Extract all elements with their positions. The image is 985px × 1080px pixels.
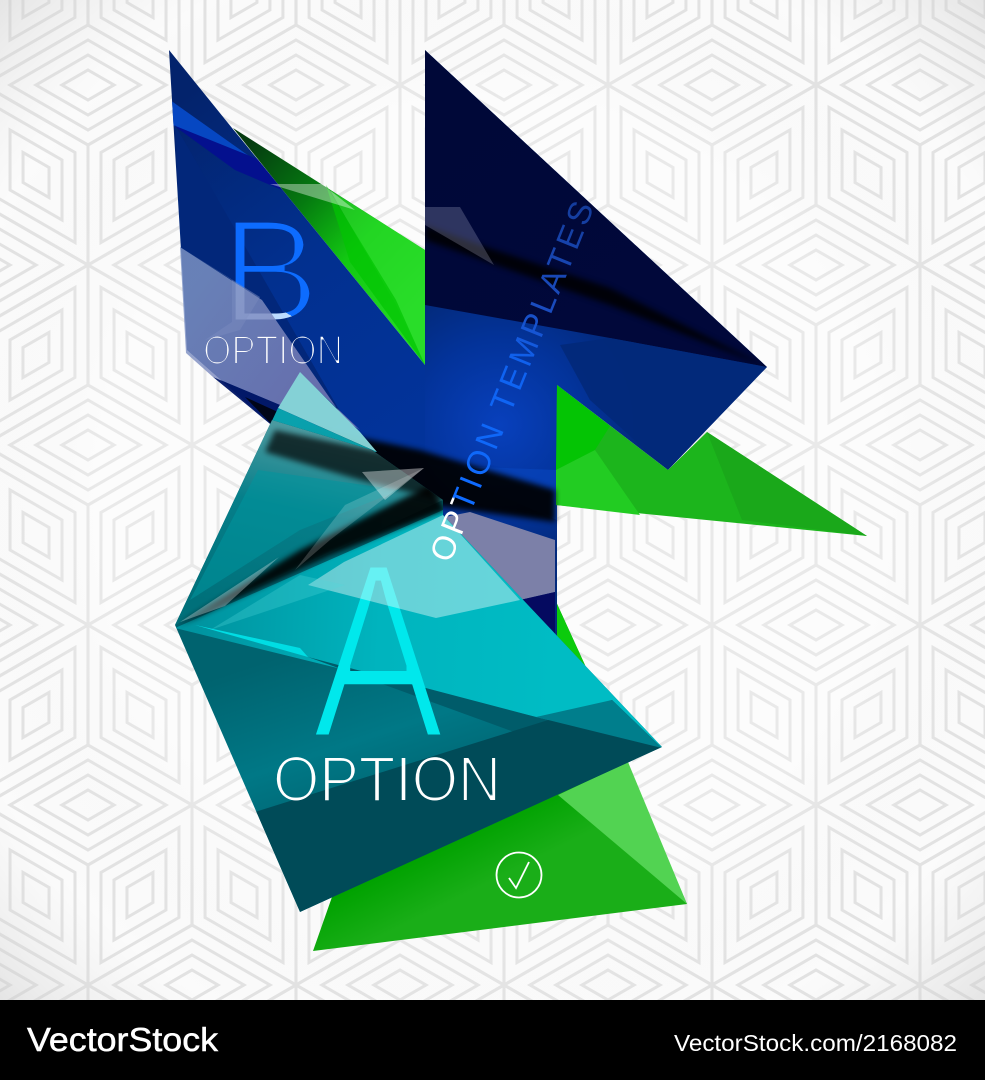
upper teal section bbox=[175, 420, 443, 625]
darkest bottom band bbox=[255, 700, 662, 912]
rotated heading: option templates: OPTION TEMPLATES bbox=[422, 196, 601, 567]
panel: lavender facet over option B bbox=[180, 247, 377, 452]
panel: lower green triangle bbox=[313, 595, 687, 951]
bright teal section bbox=[175, 510, 662, 747]
black diagonal streak bbox=[178, 485, 445, 625]
label: option B: OPTION bbox=[203, 327, 343, 373]
footer bar bbox=[0, 1000, 985, 1080]
label: option A: OPTION bbox=[273, 743, 501, 815]
dark top facet bbox=[425, 50, 767, 367]
dark lower strip bbox=[308, 657, 662, 748]
panel: option A teal facet bbox=[175, 420, 662, 912]
panel: upper left green triangle bbox=[233, 128, 425, 365]
streaks in the upper section bbox=[190, 470, 400, 600]
footer brand: VectorStock bbox=[27, 1021, 219, 1058]
panel: option B blue facet bbox=[169, 50, 425, 487]
letter B: B bbox=[221, 189, 320, 354]
panel: lower blue and lavender strip bbox=[300, 425, 555, 635]
panel: option templates navy facet bbox=[425, 50, 767, 640]
light facets over letters bbox=[180, 468, 520, 630]
footer image id: VectorStock.com/2168082 bbox=[674, 1030, 957, 1056]
icon: check mark bbox=[496, 852, 542, 898]
panel: right green triangle bbox=[556, 385, 867, 536]
cyan strip bbox=[195, 625, 308, 657]
letter A: A bbox=[311, 511, 445, 790]
